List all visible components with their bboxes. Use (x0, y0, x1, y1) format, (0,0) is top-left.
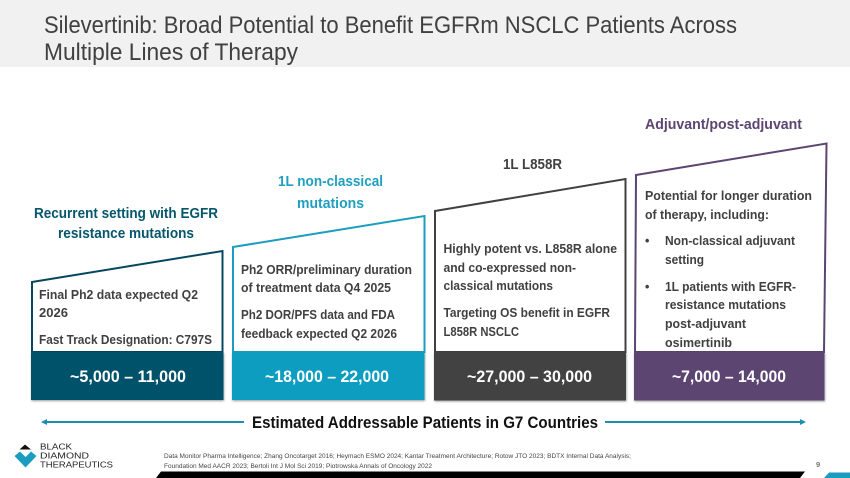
panel: recurrent setting (31, 251, 224, 400)
panel: adjuvant: of therapy, including: (645, 208, 769, 222)
panel: 1L L858R: classical mutations (444, 279, 553, 293)
band: non-classical patients (232, 352, 424, 400)
heading: 1L L858R: 1L L858R (503, 157, 562, 173)
panel: 1L L858R: Highly potent vs. L858R alone (444, 242, 617, 256)
panel: adjuvant (634, 144, 826, 400)
panel: 1L non-classical: Ph2 DOR/PFS data and FDA (241, 308, 395, 322)
footnote: references (164, 454, 631, 470)
logo: Black Diamond Therapeutics (14, 442, 113, 470)
panel: recurrent setting: Final Ph2 data expected Q2 (39, 288, 198, 302)
panel: 1L L858R (434, 179, 626, 400)
arrow: right (605, 419, 806, 425)
heading: recurrent setting (34, 206, 218, 242)
arrow: left (41, 419, 244, 425)
footnote: references: Data Monitor Pharma Intelligence; Zhang Oncotarget 2016; Heymach ESMO 2024; Kantar Treatment Architecture; Rotow JTO 2023; BDTX Internal Data Analysis; (164, 454, 631, 460)
panel: adjuvant: ~7,000 – 14,000 (672, 367, 786, 386)
panel: recurrent setting: 2026 (39, 306, 68, 320)
panel: adjuvant: resistance mutations (665, 298, 786, 312)
heading: adjuvant: Adjuvant/post-adjuvant (645, 117, 802, 133)
icon: diamond (14, 444, 36, 468)
panel: 1L non-classical: ~18,000 – 22,000 (265, 367, 389, 386)
panel: recurrent setting: ~5,000 – 11,000 (70, 367, 186, 386)
panel: 1L L858R: ~27,000 – 30,000 (467, 367, 592, 386)
footnote: references: Foundation Med AACR 2023; Bertoli Int J Mol Sci 2019; Piotrowska Annals of Oncology 2022 (164, 464, 433, 470)
panel: adjuvant: post-adjuvant (665, 317, 747, 331)
logo: Black Diamond Therapeutics: THERAPEUTICS (40, 460, 113, 470)
panel: adjuvant: 1L patients with EGFR- (665, 280, 796, 294)
panel: 1L L858R: L858R NSCLC (444, 325, 519, 339)
band: L858R patients (434, 352, 626, 400)
panel: 1L non-classical: of treatment data Q4 2025 (241, 281, 391, 295)
heading: recurrent setting: resistance mutations (58, 226, 194, 242)
caption: estimated addressable patients: Estimated Addressable Patients in G7 Countries (252, 413, 598, 432)
logo: Black Diamond Therapeutics: BLACK (40, 442, 72, 452)
panel: adjuvant: • (645, 234, 649, 248)
panel: 1L L858R: and co-expressed non- (444, 261, 576, 275)
logo: Black Diamond Therapeutics: DIAMOND (40, 450, 89, 460)
band: adjuvant patients (634, 352, 824, 400)
panel: recurrent setting: Fast Track Designation: C797S (39, 333, 212, 347)
title band: Multiple Lines of Therapy (44, 39, 298, 66)
panel: 1L non-classical: feedback expected Q2 2026 (241, 327, 397, 341)
panel: 1L non-classical (232, 216, 424, 400)
heading: 1L non-classical: mutations (297, 196, 364, 212)
page number: 9 (816, 460, 820, 469)
title band (0, 0, 850, 67)
heading: 1L non-classical (278, 174, 383, 212)
heading: recurrent setting: Recurrent setting with EGFR (34, 206, 218, 222)
footer accent: teal (824, 472, 850, 478)
heading: 1L non-classical: 1L non-classical (278, 174, 383, 190)
band: recurrent patients (31, 352, 224, 400)
panel: adjuvant: • (645, 280, 649, 294)
panel: 1L non-classical: Ph2 ORR/preliminary duration (241, 263, 412, 277)
panel: adjuvant: osimertinib (665, 336, 732, 350)
panel: adjuvant: Potential for longer duration (645, 189, 812, 203)
title band: Silevertinib: Broad Potential to Benefit EGFRm NSCLC Patients Across (44, 12, 737, 39)
panel: adjuvant: setting (665, 253, 704, 267)
panel: adjuvant: Non-classical adjuvant (665, 234, 796, 248)
footer bar: black (156, 472, 805, 478)
panel: 1L L858R: Targeting OS benefit in EGFR (444, 306, 610, 320)
